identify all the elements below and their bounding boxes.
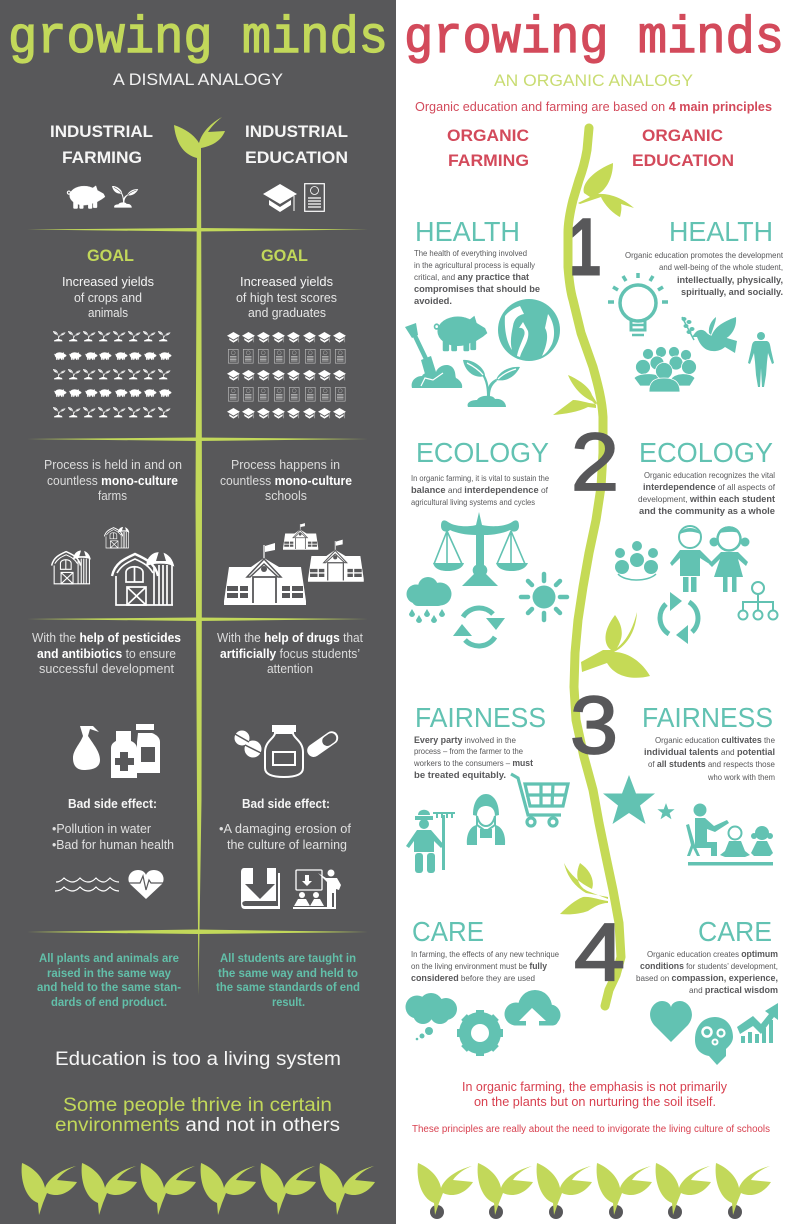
- icon grid: caps and tests: [227, 332, 346, 419]
- goal: education: of high test scores: [236, 291, 337, 305]
- section: care, farming: considered before they are used: [411, 973, 535, 984]
- section: ecology, farming: [411, 437, 549, 507]
- section: ecology, education: [638, 437, 776, 517]
- heading: organic farming: [447, 126, 529, 170]
- text: drugs: artificially focus students’: [220, 646, 360, 661]
- icon: sun: [521, 574, 567, 620]
- section: ecology, farming: agricultural living systems and cycles: [411, 497, 535, 507]
- section: ecology, education: ECOLOGY: [639, 437, 773, 468]
- text: same way, students: the same way and held to: [218, 968, 358, 980]
- text: same way, plants and animals: raised in the same way: [47, 968, 172, 980]
- section: care, education: and practical wisdom: [689, 985, 778, 996]
- section: health, farming: [414, 216, 540, 307]
- text: emphasis on soil: on the plants but on nurturing the soil itself.: [474, 1094, 716, 1109]
- icon: stars: [603, 775, 675, 824]
- icon: cloud upload: [504, 990, 560, 1026]
- numbers 1 to 4: 4: [574, 907, 625, 998]
- section: health, farming: HEALTH: [415, 216, 520, 247]
- text: bad side effect, education: [219, 797, 352, 852]
- section: fairness, education: individual talents and potential: [644, 747, 775, 758]
- subtitle: an organic analogy: AN ORGANIC ANALOGY: [494, 71, 693, 90]
- section: fairness, education: FAIRNESS: [642, 702, 773, 733]
- icon: recycle arrows: [660, 592, 698, 644]
- text: thrive in environments: [55, 1095, 340, 1136]
- section: health, farming: in the agricultural process is equally: [414, 260, 536, 270]
- section: ecology, farming: In organic farming, it is vital to sustain the: [411, 473, 549, 483]
- text: thrive in environments: Some people thrive in certain: [63, 1095, 332, 1116]
- section: health, farming: avoided.: [414, 296, 452, 307]
- vine with leaves: [553, 128, 650, 1006]
- section: fairness, farming: [413, 702, 546, 781]
- text: thrive in environments: environments and not in others: [55, 1115, 340, 1136]
- icon: schools: [224, 523, 364, 605]
- text: mono-culture farms: farms: [98, 488, 127, 503]
- goal: farming: [62, 246, 154, 320]
- section: care, education: CARE: [698, 916, 772, 947]
- icon: heart with pulse: [128, 870, 164, 899]
- section: ecology, farming: balance and interdependence of: [411, 485, 549, 496]
- icon: human body: [748, 332, 774, 387]
- section: ecology, education: Organic education recognizes the vital: [644, 470, 775, 480]
- numbers 1 to 4: 3: [570, 680, 618, 771]
- text: mono-culture schools: [220, 457, 352, 503]
- section: health, farming: The health of everything involved: [414, 248, 527, 258]
- icon: shopping cart: [511, 774, 568, 826]
- icon: graded document: [305, 184, 324, 211]
- text: drugs: attention: [267, 661, 313, 676]
- icon: pills, jar and capsule: [234, 725, 341, 777]
- panel: organic analogy background: [396, 0, 792, 1224]
- numbers 1 to 4: 2: [571, 417, 619, 508]
- text: drugs: With the help of drugs that: [217, 630, 363, 645]
- text: bad side effect, farming: •Bad for human health: [52, 838, 174, 852]
- icon: barns: [52, 526, 173, 605]
- section: care, education: conditions for students’ development,: [640, 961, 778, 972]
- icon grid: crops and animals: [53, 331, 172, 417]
- text: four main principles: Organic education and farming are based on 4 main principles: [415, 99, 772, 114]
- goal: farming: animals: [88, 306, 128, 320]
- panel: dismal analogy background: [0, 0, 396, 1224]
- icon: sprout: [112, 186, 138, 208]
- icon: graduation cap: [263, 184, 297, 212]
- goal: education: [236, 246, 337, 320]
- row of sprouts with soil, right: [418, 1163, 771, 1219]
- text: bad side effect, education: •A damaging erosion of: [219, 822, 352, 836]
- icon: light bulb: [608, 273, 668, 335]
- section: health, education: spiritually, and socially.: [681, 287, 783, 298]
- subtitle: a dismal analogy: A DISMAL ANALOGY: [113, 71, 283, 89]
- text: emphasis on soil: In organic farming, the emphasis is not primarily: [462, 1079, 727, 1094]
- goal: education: Increased yields: [240, 275, 333, 289]
- numbers 1 to 4: [569, 202, 625, 998]
- section: care, farming: In farming, the effects of any new technique: [411, 949, 559, 959]
- text: same way, plants and animals: and held to the same stan-: [37, 982, 181, 994]
- section: fairness, farming: be treated equitably.: [414, 770, 506, 781]
- icon: piggy: [435, 316, 487, 351]
- icon: teacher and students: [293, 870, 341, 909]
- section: care, farming: CARE: [412, 916, 484, 947]
- icon: recycle arrows: [453, 608, 505, 646]
- section: fairness, farming: FAIRNESS: [415, 702, 546, 733]
- section: health, education: intellectually, physically,: [677, 275, 783, 286]
- text: bad side effect, farming: [52, 797, 174, 852]
- section: ecology, farming: ECOLOGY: [416, 437, 549, 468]
- icon: dove with olive branch: [682, 317, 737, 353]
- section: care, farming: on the living environment must be fully: [411, 961, 548, 972]
- icon: growth chart: [737, 1003, 778, 1043]
- text: mono-culture farms: countless mono-culture: [47, 473, 178, 488]
- icon: shovel in soil: [405, 323, 462, 388]
- section: care, farming: [411, 916, 559, 984]
- heading: industrial education: EDUCATION: [245, 148, 348, 167]
- text: bad side effect, education: the culture of learning: [227, 838, 347, 852]
- text: same way, students: [216, 953, 360, 1009]
- heading: industrial education: [245, 122, 348, 167]
- text: bad side effect, education: Bad side effect:: [242, 797, 330, 811]
- heading: organic education: ORGANIC: [642, 126, 723, 145]
- section: care, education: Organic education creates optimum: [647, 949, 778, 960]
- icon: crowd: [634, 346, 696, 392]
- text: living culture of schools: These principles are really about the need to invigorate the living culture of schools: [412, 1124, 770, 1135]
- text: emphasis on soil: [462, 1079, 727, 1109]
- text: same way, plants and animals: dards of end product.: [51, 997, 167, 1009]
- heading: organic education: [632, 126, 734, 170]
- icon: hierarchy diagram: [738, 582, 778, 620]
- text: mono-culture farms: Process is held in and on: [44, 457, 182, 472]
- section: care, education: based on compassion, experience,: [636, 973, 778, 984]
- section: care, education: [636, 916, 778, 996]
- icon: heart: [650, 1001, 692, 1042]
- section: fairness, education: who work with them: [707, 772, 775, 782]
- icon: teacher with children: [686, 804, 773, 866]
- section: fairness, farming: Every party involved in the: [414, 735, 516, 746]
- icon: boy and girl holding hands: [670, 526, 750, 592]
- text: same way, students: the same standards of end: [216, 982, 360, 994]
- goal: farming: GOAL: [87, 246, 134, 265]
- section: health, farming: critical, and any practice that: [414, 272, 530, 283]
- section: health, education: [625, 216, 784, 298]
- numbers 1 to 4: 1: [569, 202, 601, 293]
- section: fairness, education: [642, 702, 775, 782]
- title: growing minds dismal: growing minds: [8, 9, 388, 68]
- icon: gear: [457, 1010, 503, 1056]
- heading: organic farming: FARMING: [448, 151, 529, 170]
- section: fairness, education: of all students and respects those: [648, 759, 775, 770]
- text: same way, plants and animals: [37, 953, 181, 1009]
- text: mono-culture farms: [44, 457, 182, 503]
- text: pesticides: With the help of pesticides: [32, 630, 181, 645]
- icon: farmer with rake: [406, 810, 455, 873]
- central seedling stem: [174, 117, 225, 995]
- section: health, education: HEALTH: [669, 216, 773, 247]
- icon: pig: [67, 186, 105, 209]
- icon: rain cloud: [406, 577, 452, 623]
- icon: thought cloud: [406, 993, 457, 1040]
- section: ecology, education: and the community as a whole: [639, 506, 775, 517]
- heading: organic farming: ORGANIC: [447, 126, 529, 145]
- goal: education: and graduates: [248, 306, 326, 320]
- icon: head with gears: [695, 1017, 733, 1065]
- icon: spray bag and medicine bottles: [73, 724, 160, 778]
- text: pesticides: [32, 630, 181, 676]
- text: bad side effect, farming: •Pollution in water: [52, 822, 151, 836]
- heading: organic education: EDUCATION: [632, 151, 734, 170]
- text: education is a living system: Education is too a living system: [55, 1049, 341, 1070]
- text: same way, plants and animals: All plants and animals are: [39, 953, 179, 965]
- section: health, farming: compromises that should be: [414, 284, 540, 295]
- icon: sprout: [463, 360, 520, 407]
- text: mono-culture schools: Process happens in: [231, 457, 340, 472]
- row of sprouts, left: [22, 1163, 375, 1215]
- text: same way, students: All students are taught in: [220, 953, 356, 965]
- text: same way, students: result.: [272, 997, 305, 1009]
- heading: industrial farming: [50, 122, 153, 167]
- icon: earth: [498, 299, 560, 361]
- icon: group of people: [615, 541, 658, 580]
- section: ecology, education: development, within each student: [638, 494, 776, 505]
- text: mono-culture schools: countless mono-culture: [220, 473, 352, 488]
- text: pesticides: successful development: [39, 661, 174, 676]
- section: ecology, education: interdependence of all aspects of: [643, 482, 776, 493]
- heading: industrial farming: INDUSTRIAL: [50, 122, 153, 141]
- text: drugs: [217, 630, 363, 676]
- icon: worker with cap: [467, 794, 505, 845]
- heading: industrial education: INDUSTRIAL: [245, 122, 348, 141]
- heading: industrial farming: FARMING: [62, 148, 142, 167]
- goal: farming: Increased yields: [62, 275, 154, 289]
- section: fairness, education: Organic education cultivates the: [655, 735, 775, 746]
- text: pesticides: and antibiotics to ensure: [37, 646, 176, 661]
- section: fairness, farming: process – from the farmer to the: [414, 746, 523, 756]
- divider lines: [27, 228, 368, 934]
- icon: water waves: [55, 878, 119, 891]
- section: fairness, farming: workers to the consumers – must: [413, 758, 534, 769]
- icon: balance scales: [433, 512, 528, 586]
- icon: book with down arrow: [241, 868, 280, 909]
- goal: education: GOAL: [261, 246, 308, 265]
- text: bad side effect, farming: Bad side effect:: [68, 797, 157, 811]
- goal: farming: of crops and: [74, 291, 142, 305]
- text: mono-culture schools: schools: [265, 488, 307, 503]
